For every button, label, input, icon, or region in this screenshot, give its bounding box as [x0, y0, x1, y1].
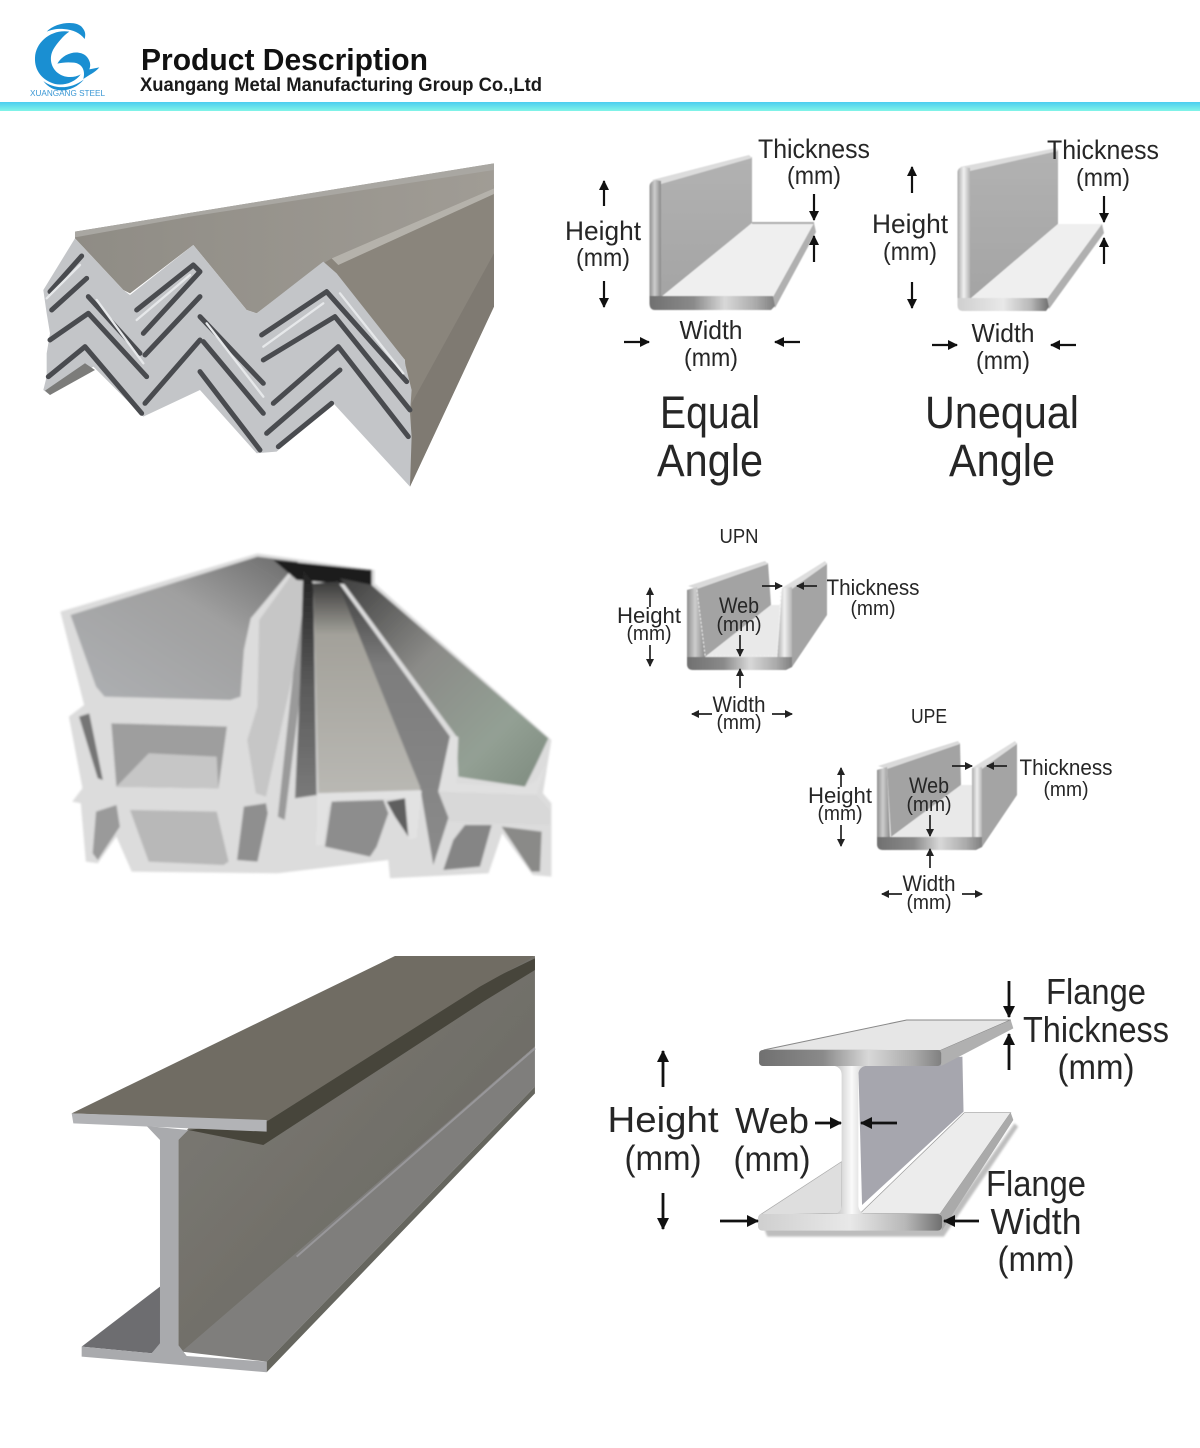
centre opening	[325, 800, 388, 857]
thickness arrows	[1103, 196, 1105, 264]
diagram: UPE channel	[808, 706, 1112, 914]
label: thickness: (mm)	[850, 598, 896, 620]
label: UPE: UPE	[911, 706, 947, 728]
lower right band	[438, 792, 550, 825]
centre channel top	[313, 582, 422, 793]
width arrows	[882, 893, 982, 895]
label: web: Web	[735, 1100, 809, 1141]
label: thickness	[758, 134, 870, 190]
diagram: UPN channel	[617, 526, 920, 734]
label: thickness: (mm)	[1044, 779, 1088, 801]
logo wordmark: XUANGANG STEEL	[30, 89, 106, 98]
header cyan bar	[0, 102, 1200, 111]
dark side of right channel	[337, 580, 450, 865]
label: web	[716, 593, 762, 636]
label: UPN: UPN	[720, 526, 758, 548]
thickness arrows	[762, 585, 817, 587]
label: web	[906, 773, 952, 816]
flange thickness arrows	[1008, 981, 1010, 1070]
top faces	[75, 163, 494, 313]
row 3 left opening	[93, 805, 120, 860]
dark gaps between the bars	[48, 256, 410, 450]
I-beam shape	[758, 1020, 1018, 1237]
top channel right flange side	[247, 563, 310, 797]
label: thickness	[826, 575, 920, 620]
label: web: (mm)	[906, 794, 952, 816]
thickness arrows	[952, 765, 1007, 767]
angle shape	[650, 155, 816, 310]
label: flange width	[986, 1163, 1086, 1279]
row 2 opening	[111, 723, 227, 788]
label: thickness	[1047, 135, 1159, 192]
top flange end	[72, 1113, 267, 1132]
centre channel cut	[316, 791, 422, 846]
dark back	[273, 560, 372, 587]
label: height: Height	[565, 216, 641, 246]
strip beside the centre channel	[278, 573, 308, 820]
web arrows	[929, 815, 931, 868]
label: height	[565, 216, 641, 272]
web arrows	[815, 1122, 897, 1124]
label: web: (mm)	[734, 1140, 810, 1179]
label: web: Web	[719, 593, 759, 618]
diagram: Unequal Angle	[872, 135, 1159, 486]
label: height: Height	[808, 783, 872, 808]
label: thickness: (mm)	[787, 162, 841, 190]
label: height	[808, 783, 872, 825]
label: flange thickness	[1023, 971, 1169, 1087]
left stack of channels	[60, 553, 551, 878]
label: thickness: Thickness	[1047, 135, 1159, 165]
thickness arrows	[813, 194, 815, 262]
icon: Xuangang Steel logo	[35, 23, 99, 90]
label: height: (mm)	[576, 244, 630, 272]
label: web: Web	[909, 773, 949, 798]
heading: Unequal Angle: Angle	[949, 435, 1055, 486]
shadow under flange	[188, 958, 535, 1145]
heading: Equal Angle: Angle	[657, 435, 763, 486]
header: logo and titles	[30, 23, 542, 98]
subtitle: Xuangang Metal Manufacturing Group Co.,Ltd	[140, 75, 542, 96]
photo: stacked steel angle bars	[43, 163, 494, 487]
label: flange thickness: Thickness	[1023, 1009, 1169, 1050]
right channel surface	[340, 578, 548, 787]
web arrows	[739, 635, 741, 688]
label: width	[972, 318, 1034, 375]
lower flange highlight	[297, 1048, 535, 1257]
label: thickness	[1020, 755, 1112, 801]
heading: Unequal Angle	[925, 387, 1079, 486]
label: height: Height	[608, 1099, 718, 1140]
label: height	[872, 209, 948, 266]
height arrows	[662, 1051, 664, 1229]
height arrows	[649, 588, 651, 666]
label: width: Width	[712, 692, 766, 717]
label: height: Height	[617, 603, 681, 628]
bottom-left inner wedge	[45, 363, 95, 395]
label: web: (mm)	[716, 614, 762, 636]
angle shape	[958, 148, 1104, 311]
lower left flange surface	[82, 1287, 160, 1353]
UPN shape	[687, 561, 827, 670]
label: flange thickness: (mm)	[1058, 1048, 1134, 1087]
lower right openings	[443, 825, 492, 870]
label: height	[608, 1099, 718, 1178]
UPE shape	[877, 741, 1017, 850]
label: thickness: Thickness	[1020, 755, 1112, 780]
label: height: (mm)	[883, 238, 937, 266]
label: width	[712, 692, 766, 734]
label: width	[902, 871, 956, 914]
label: width: (mm)	[716, 712, 762, 734]
cut ends silhouette	[43, 238, 412, 487]
top channel floor	[71, 557, 298, 700]
height arrows	[603, 181, 605, 307]
photo: stacked steel channels	[60, 553, 551, 878]
right channel cut	[438, 737, 547, 795]
heading: Equal Angle	[657, 387, 763, 486]
label: flange width: Flange	[986, 1163, 1086, 1204]
width arrows	[692, 713, 792, 715]
lower flange edge	[267, 1087, 535, 1372]
label: width	[680, 315, 742, 372]
label: width: Width	[680, 315, 742, 345]
channels silhouette	[60, 553, 551, 878]
label: width: (mm)	[906, 892, 952, 914]
height arrows	[911, 167, 913, 308]
top flange surface	[72, 956, 535, 1122]
heading: Equal Angle: Equal	[660, 387, 760, 438]
label: thickness: (mm)	[1076, 164, 1130, 192]
label: thickness: Thickness	[758, 134, 870, 164]
diagram: I-beam	[608, 971, 1169, 1279]
label: height: (mm)	[818, 803, 862, 825]
row 2 left sliver	[79, 713, 103, 780]
label: thickness: Thickness	[826, 575, 920, 600]
label: width: (mm)	[684, 344, 738, 372]
label: height: (mm)	[624, 1139, 702, 1178]
web end and lower flange end	[82, 1126, 267, 1372]
web face	[178, 956, 535, 1353]
title: Product Description	[141, 42, 428, 77]
label: flange thickness: Flange	[1046, 971, 1146, 1012]
right channels	[273, 560, 550, 872]
label: flange width: Width	[990, 1201, 1082, 1242]
row 3 opening	[130, 810, 229, 865]
centre dark strip	[295, 570, 317, 798]
width arrows	[624, 341, 800, 343]
highlight strokes	[47, 265, 403, 397]
label: web	[734, 1100, 810, 1179]
label: width: (mm)	[976, 347, 1030, 375]
label: width: Width	[972, 318, 1034, 348]
width arrows	[932, 344, 1076, 346]
large side faces	[323, 185, 494, 487]
diagram: Equal Angle	[565, 134, 870, 486]
label: height: Height	[872, 209, 948, 239]
heading: Unequal Angle: Unequal	[925, 387, 1079, 438]
height arrows	[840, 768, 842, 846]
photo: steel I-beam	[72, 956, 535, 1372]
label: height	[617, 603, 681, 645]
lower flange surface	[182, 1047, 535, 1362]
label: width: Width	[902, 871, 956, 896]
flange width arrows	[720, 1220, 979, 1222]
label: height: (mm)	[626, 623, 672, 645]
second opening	[387, 798, 408, 837]
label: flange width: (mm)	[998, 1240, 1074, 1279]
